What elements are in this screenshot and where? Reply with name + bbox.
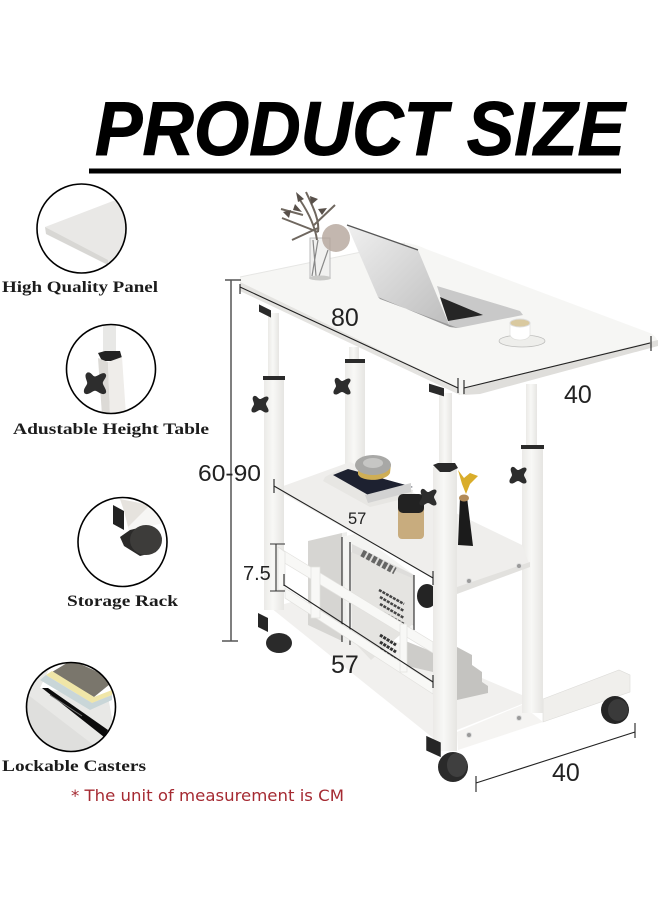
foot: front — [457, 705, 543, 750]
icon: height adjuster — [66, 324, 156, 415]
dimension: base depth 40: 40 — [552, 759, 580, 787]
caster: front — [427, 737, 468, 782]
dimension: height 60-90 — [198, 280, 261, 641]
caster: right — [601, 696, 629, 724]
coffee cup — [499, 319, 545, 347]
leg: front left — [263, 313, 285, 610]
caster: left — [258, 613, 292, 653]
feature: high quality panel — [2, 184, 159, 296]
dimension: width 80 — [240, 284, 458, 393]
dimension: depth 40 top: 40 — [564, 381, 592, 409]
feature: storage rack — [67, 498, 178, 610]
dimension: width 80: 80 — [331, 304, 359, 332]
feature: lockable casters — [2, 660, 146, 775]
adjustment knobs — [251, 378, 527, 506]
dimension: base depth 40 — [476, 723, 635, 792]
label: adjustable height table: Adustable Height Table — [13, 421, 209, 438]
books — [308, 532, 488, 700]
dimension: depth 40 top — [464, 336, 651, 409]
dimension: rack height 7.5: 7.5 — [243, 563, 271, 585]
bottom shelf — [271, 600, 522, 738]
table top — [240, 243, 658, 395]
foot: right — [543, 670, 630, 722]
label: storage rack: Storage Rack — [67, 593, 178, 610]
title: PRODUCT SIZE — [95, 87, 627, 172]
rack rails — [278, 547, 433, 694]
dimension: height 60-90: 60-90 — [198, 460, 261, 486]
leg: rear left — [345, 347, 365, 464]
leg: front right — [433, 393, 458, 751]
product: desk on casters — [240, 192, 658, 782]
table brackets — [260, 306, 443, 395]
dimension: rack height 7.5 — [243, 544, 285, 591]
label: lockable casters: Lockable Casters — [2, 758, 146, 775]
icon: shelf with books — [26, 662, 116, 752]
dimension: rack 57 — [284, 574, 433, 688]
leg: rear right — [521, 384, 544, 713]
rear caster behind shelf — [417, 584, 437, 608]
vase with dried flowers — [281, 192, 350, 280]
note: unit of measurement: * The unit of measurement is CM — [71, 786, 344, 805]
shelf items: jar — [398, 494, 424, 539]
shelf items: tray and candle — [323, 455, 413, 507]
icon: panel corner — [37, 184, 130, 275]
feature: adjustable height — [13, 324, 209, 438]
shelf bolts — [450, 564, 522, 738]
dimension: shelf 57 — [274, 479, 433, 585]
shelf items: bottle with gold leaves — [458, 470, 478, 546]
dimension: rack 57: 57 — [331, 651, 359, 679]
label: high quality panel: High Quality Panel — [2, 279, 159, 296]
icon: caster wheel — [78, 498, 168, 586]
dimension: shelf 57: 57 — [348, 510, 366, 528]
middle shelf — [275, 462, 530, 593]
laptop — [347, 225, 523, 328]
